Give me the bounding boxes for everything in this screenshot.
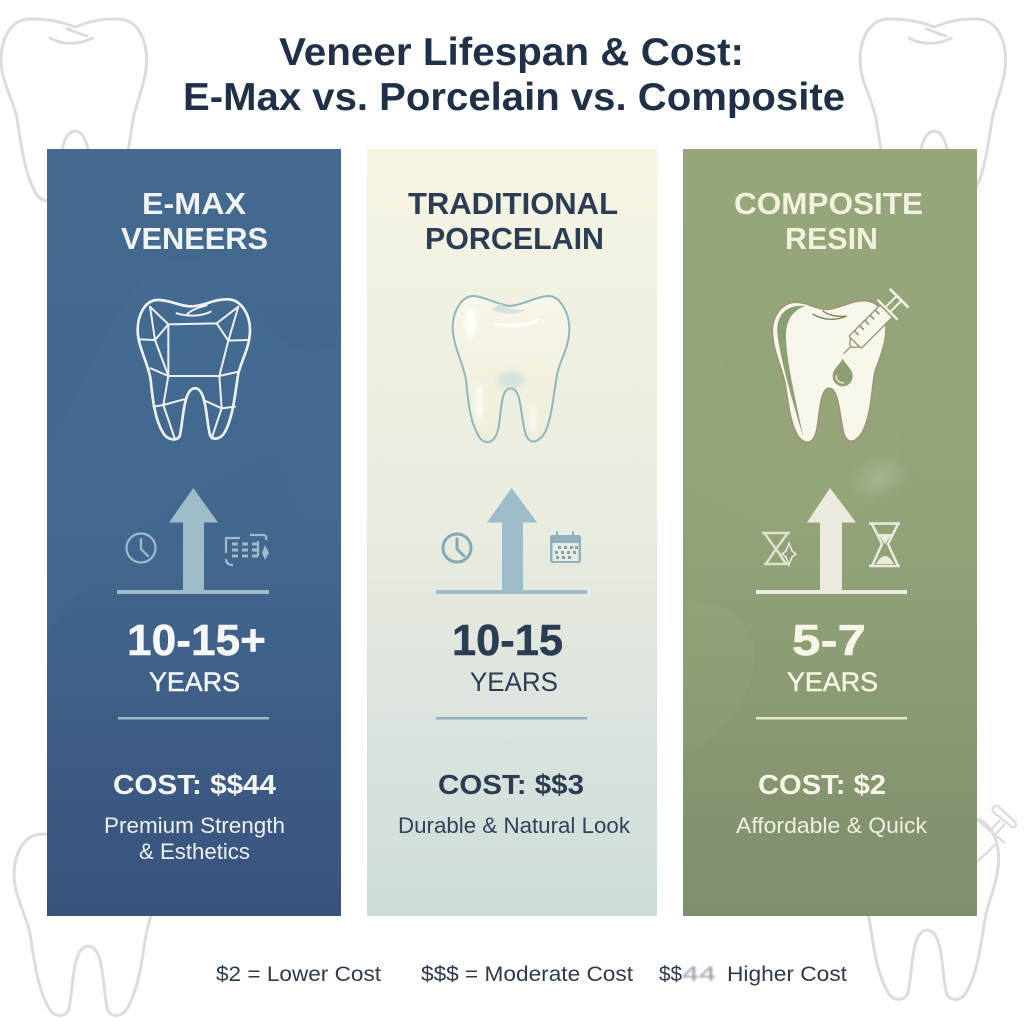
panel: E-Max veneers [47,149,341,916]
title [183,31,845,119]
lifespan value [127,616,266,697]
heading: VENEERS [121,222,268,256]
cost legend [216,962,847,986]
icon: clock [126,534,156,562]
lifespan arrow [756,488,907,594]
icon: calendar [226,535,269,565]
cost: COST: $$44 [113,769,277,800]
heading: RESIN [785,222,878,256]
panel background [683,149,977,916]
lifespan value [787,616,878,697]
cost legend: $2 = Lower Cost [216,962,381,986]
panel background [367,149,657,916]
background tooth: bottom left [14,834,160,1015]
title: E-Max vs. Porcelain vs. Composite [183,76,845,119]
title: Veneer Lifespan & Cost: [279,31,744,74]
heading: PORCELAIN [425,222,604,256]
icon: clock [443,534,471,562]
lifespan value: YEARS [470,667,558,697]
icon: hourglass [869,524,900,566]
lifespan value [452,616,563,697]
panel: Composite resin [683,149,977,916]
description: Affordable & Quick [736,813,928,838]
description [104,813,285,864]
description: Premium Strength [104,813,285,838]
panel background [47,149,341,916]
lifespan value: 10-15 [452,616,563,665]
cost: COST: $2 [758,769,886,800]
icon: composite tooth with syringe [772,289,909,442]
heading: E-MAX [142,187,247,221]
icon: crystalline tooth [138,299,250,439]
heading [121,187,268,256]
cost legend: $$$ = Moderate Cost [421,962,633,986]
cost legend: Higher Cost [727,962,847,986]
heading [408,187,618,256]
background tooth: top left [1,19,147,200]
heading: TRADITIONAL [408,187,618,221]
background tooth with syringe: bottom right [853,806,1016,999]
lifespan value: 10-15+ [127,616,266,665]
lifespan arrow [117,488,269,594]
icon: fading hourglass with sparkle [762,533,796,565]
lifespan value: YEARS [787,667,878,697]
description: & Esthetics [139,839,250,864]
lifespan value: YEARS [149,667,240,697]
lifespan value: 5-7 [792,616,866,665]
cost legend: 44 [682,962,716,986]
heading [734,187,923,256]
cost legend: $$ [659,962,682,986]
cost: COST: $$3 [438,769,584,800]
icon: calendar [550,531,581,563]
heading: COMPOSITE [734,187,923,221]
panel: Traditional porcelain [367,149,657,916]
description: Durable & Natural Look [398,813,631,838]
icon: porcelain tooth [453,296,569,442]
lifespan arrow [436,488,587,594]
background tooth: top right [860,19,1006,200]
